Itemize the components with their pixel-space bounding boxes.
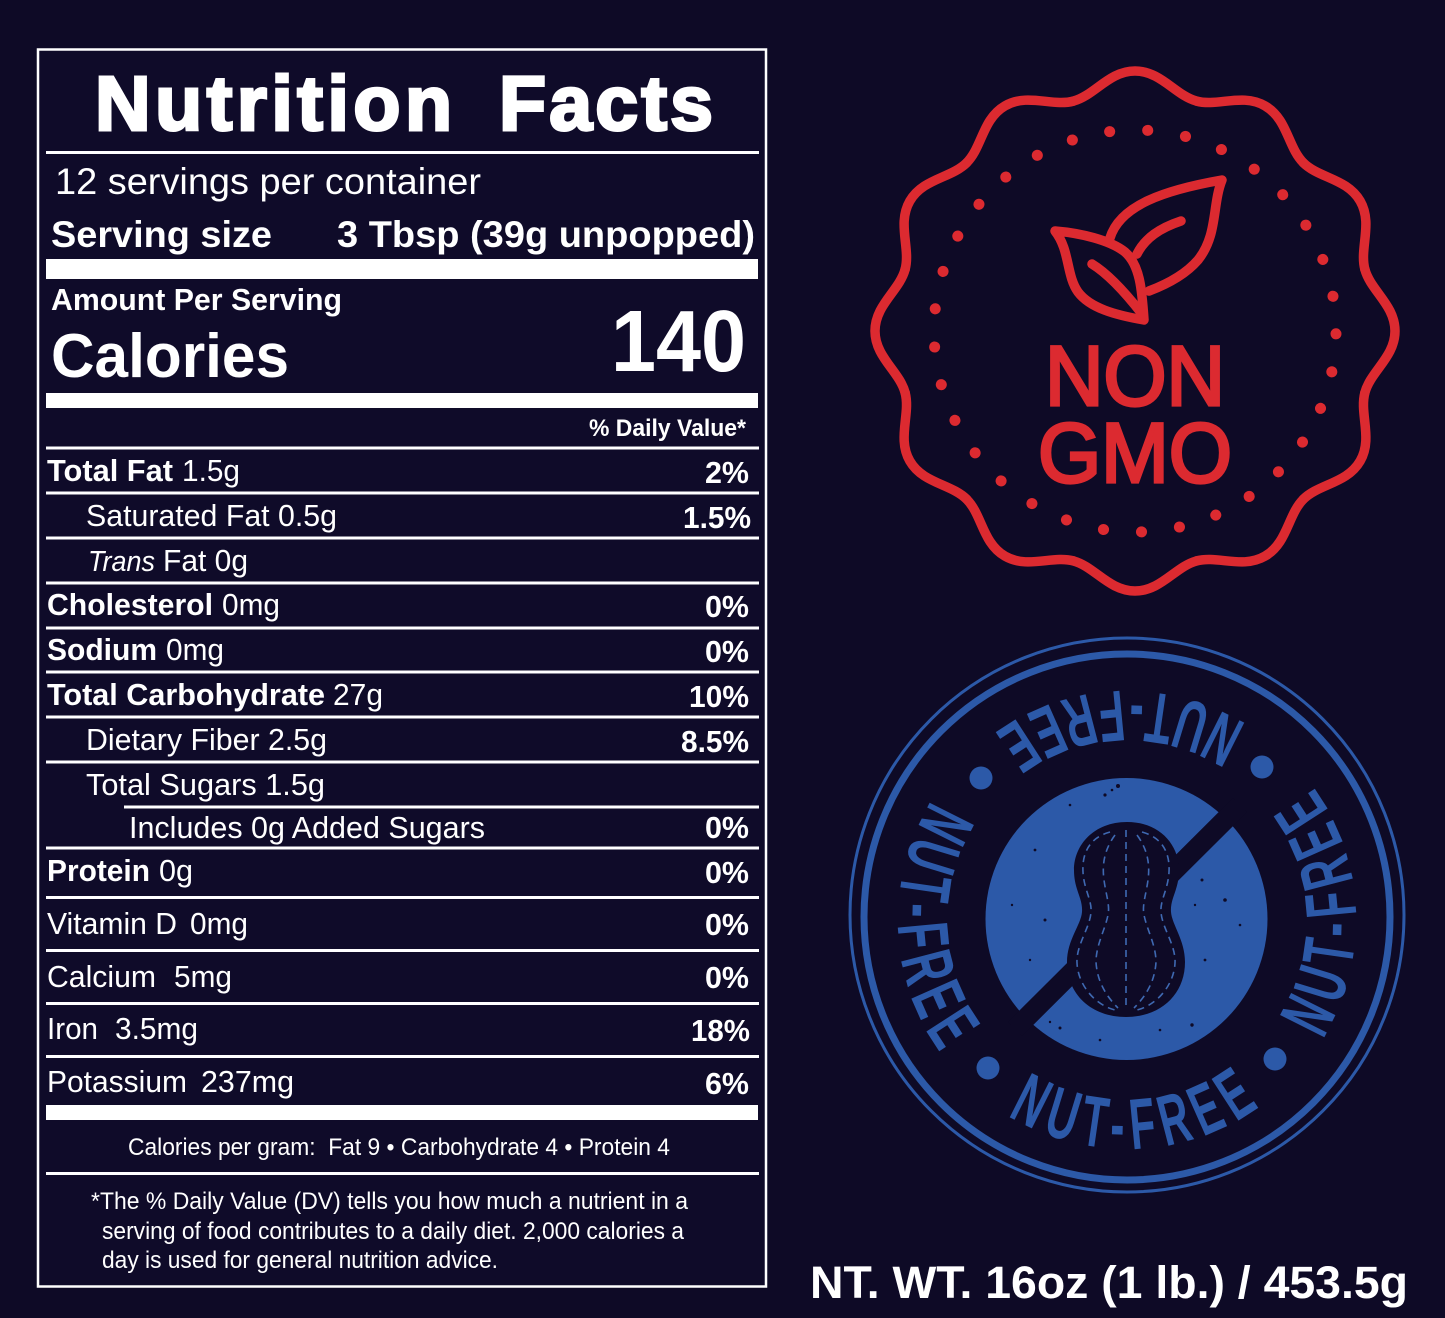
row: protein: 0g	[159, 853, 193, 888]
calories per gram note: Calories per gram: Fat 9 • Carbohydrate 4 • Protein 4	[128, 1134, 670, 1161]
row: total fat: 1.5g	[182, 453, 240, 488]
row: added sugars: 0%	[705, 810, 749, 845]
outer rings	[850, 638, 1404, 1192]
row: protein	[47, 853, 749, 890]
curved text: nut-free: NUT-FREE	[996, 690, 1244, 774]
row: trans fat: Fat 0g	[163, 543, 248, 578]
curved text: nut-free	[898, 690, 1356, 1150]
row: cholesterol: Cholesterol	[47, 587, 213, 622]
row: sodium: 0mg	[166, 632, 224, 667]
row: cholesterol: 0%	[705, 589, 749, 624]
row: vitamin d: 0mg	[190, 906, 248, 941]
daily value footnote	[91, 1188, 688, 1274]
heading: Nutrition Facts: Nutrition	[95, 61, 452, 147]
icon: leaves	[1055, 180, 1222, 320]
row: total sugars: Total Sugars 1.5g	[86, 767, 325, 802]
servings per container: 12 servings per container	[55, 161, 481, 202]
row: sodium: Sodium	[47, 632, 157, 667]
daily value footnote: serving of food contributes to a daily diet. 2,000 calories a	[102, 1218, 684, 1245]
row: total fat: 2%	[705, 455, 749, 490]
row: trans fat: Trans	[88, 546, 155, 578]
row: protein: Protein	[47, 853, 150, 888]
row: calcium	[47, 959, 749, 995]
center disc	[986, 778, 1268, 1060]
row: total carbohydrate: Total Carbohydrate	[47, 677, 325, 712]
separator dots	[970, 756, 1286, 1080]
row: calcium: 5mg	[174, 959, 232, 994]
row: dietary fiber	[86, 722, 749, 759]
text: non gmo: NON	[1045, 329, 1225, 423]
row: sodium: 0%	[705, 634, 749, 669]
row: iron	[47, 1011, 750, 1048]
row: potassium: 237mg	[201, 1064, 294, 1099]
row: added sugars	[129, 810, 749, 845]
row: iron: Iron	[47, 1011, 98, 1046]
calories value: 140	[611, 293, 746, 390]
row: trans fat	[88, 543, 248, 578]
badge: nut free stamp	[848, 636, 1406, 1194]
row: protein: 0%	[705, 855, 749, 890]
row: cholesterol: 0mg	[222, 587, 280, 622]
curved text: nut-free: NUT-FREE	[1010, 1066, 1258, 1150]
curved text: nut-free: NUT-FREE	[1274, 788, 1356, 1038]
serving size	[51, 214, 755, 255]
icon: peanut	[1067, 822, 1185, 1017]
row: potassium: 6%	[705, 1066, 749, 1101]
row: vitamin d: 0%	[705, 907, 749, 942]
daily value footnote: *The % Daily Value (DV) tells you how much a nutrient in a	[91, 1188, 688, 1215]
panel: nutrition facts label	[38, 50, 766, 1286]
prohibition slash	[1015, 805, 1240, 1029]
serving size: 3 Tbsp (39g unpopped)	[337, 214, 755, 255]
dotted ring	[931, 127, 1339, 535]
calories label: Calories	[51, 322, 289, 391]
row: calcium: Calcium	[47, 959, 156, 994]
row: added sugars: Includes 0g Added Sugars	[129, 810, 485, 845]
amount per serving: Amount Per Serving	[51, 282, 342, 317]
row: saturated fat: Saturated Fat 0.5g	[86, 498, 337, 533]
row: total carbohydrate: 27g	[333, 677, 383, 712]
row: total fat	[47, 453, 749, 490]
row: potassium: Potassium	[47, 1064, 187, 1099]
row: potassium	[47, 1064, 749, 1101]
row: vitamin d	[47, 906, 749, 942]
curved text: nut-free: NUT-FREE	[898, 802, 980, 1052]
row: cholesterol	[47, 587, 749, 624]
text: non gmo: GMO	[1038, 406, 1232, 500]
row: vitamin d: Vitamin D	[47, 906, 177, 941]
row: calcium: 0%	[705, 960, 749, 995]
heading: Nutrition Facts	[95, 61, 713, 147]
row: saturated fat: 1.5%	[683, 500, 751, 535]
row: sodium	[47, 632, 749, 669]
daily value footnote: day is used for general nutrition advice.	[102, 1247, 498, 1274]
row: total carbohydrate	[47, 677, 749, 714]
row: dietary fiber: 8.5%	[681, 724, 749, 759]
text: non gmo	[1038, 329, 1232, 500]
row: saturated fat	[86, 498, 751, 535]
row: iron: 18%	[691, 1013, 750, 1048]
net weight: NT. WT. 16oz (1 lb.) / 453.5g	[810, 1257, 1408, 1308]
scalloped border	[875, 71, 1395, 591]
heading: Nutrition Facts: Facts	[499, 61, 713, 147]
row: iron: 3.5mg	[115, 1011, 198, 1046]
daily value header: % Daily Value*	[589, 415, 747, 442]
badge: non gmo	[875, 71, 1395, 591]
row: dietary fiber: Dietary Fiber 2.5g	[86, 722, 327, 757]
serving size: Serving size	[51, 214, 272, 255]
row: total fat: Total Fat	[47, 453, 173, 488]
row: total carbohydrate: 10%	[689, 679, 749, 714]
